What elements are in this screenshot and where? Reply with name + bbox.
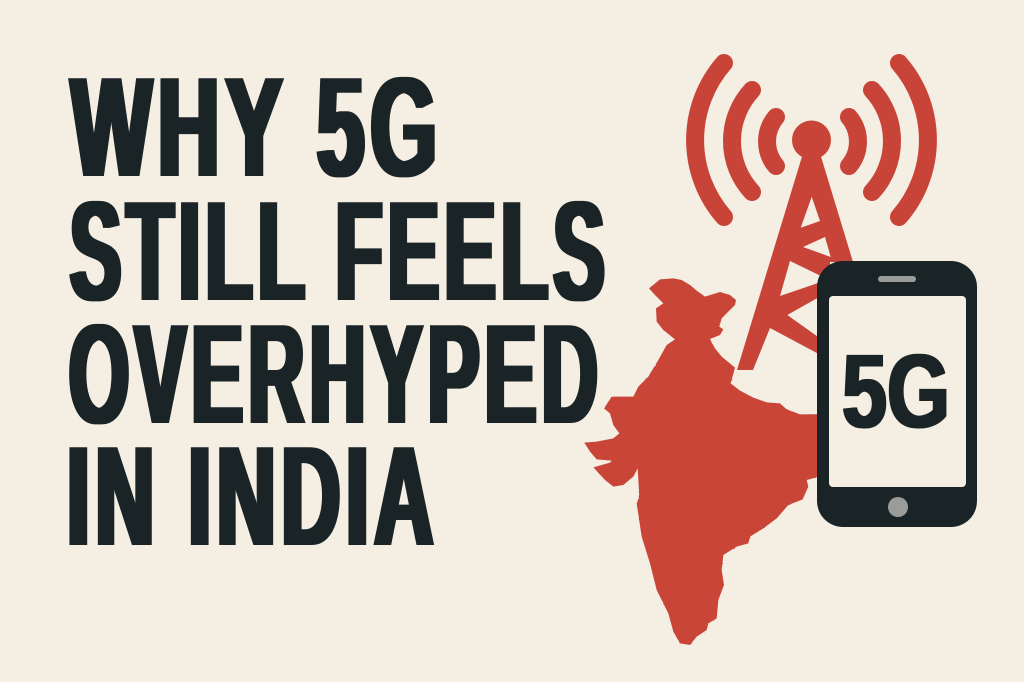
icon: map of India [584,278,833,645]
5G label: 5G [842,334,950,450]
icon: radio tower [737,120,853,370]
icon: broadcast signal waves [695,63,928,217]
icon: smartphone [817,261,977,527]
phone home button [888,497,908,517]
title: OVERHYPED [69,295,603,454]
phone screen [829,296,966,487]
title: WHY 5G [71,48,443,207]
phone body [817,261,977,527]
title: IN INDIA [67,417,439,576]
phone speaker [878,276,916,282]
title [67,48,610,576]
